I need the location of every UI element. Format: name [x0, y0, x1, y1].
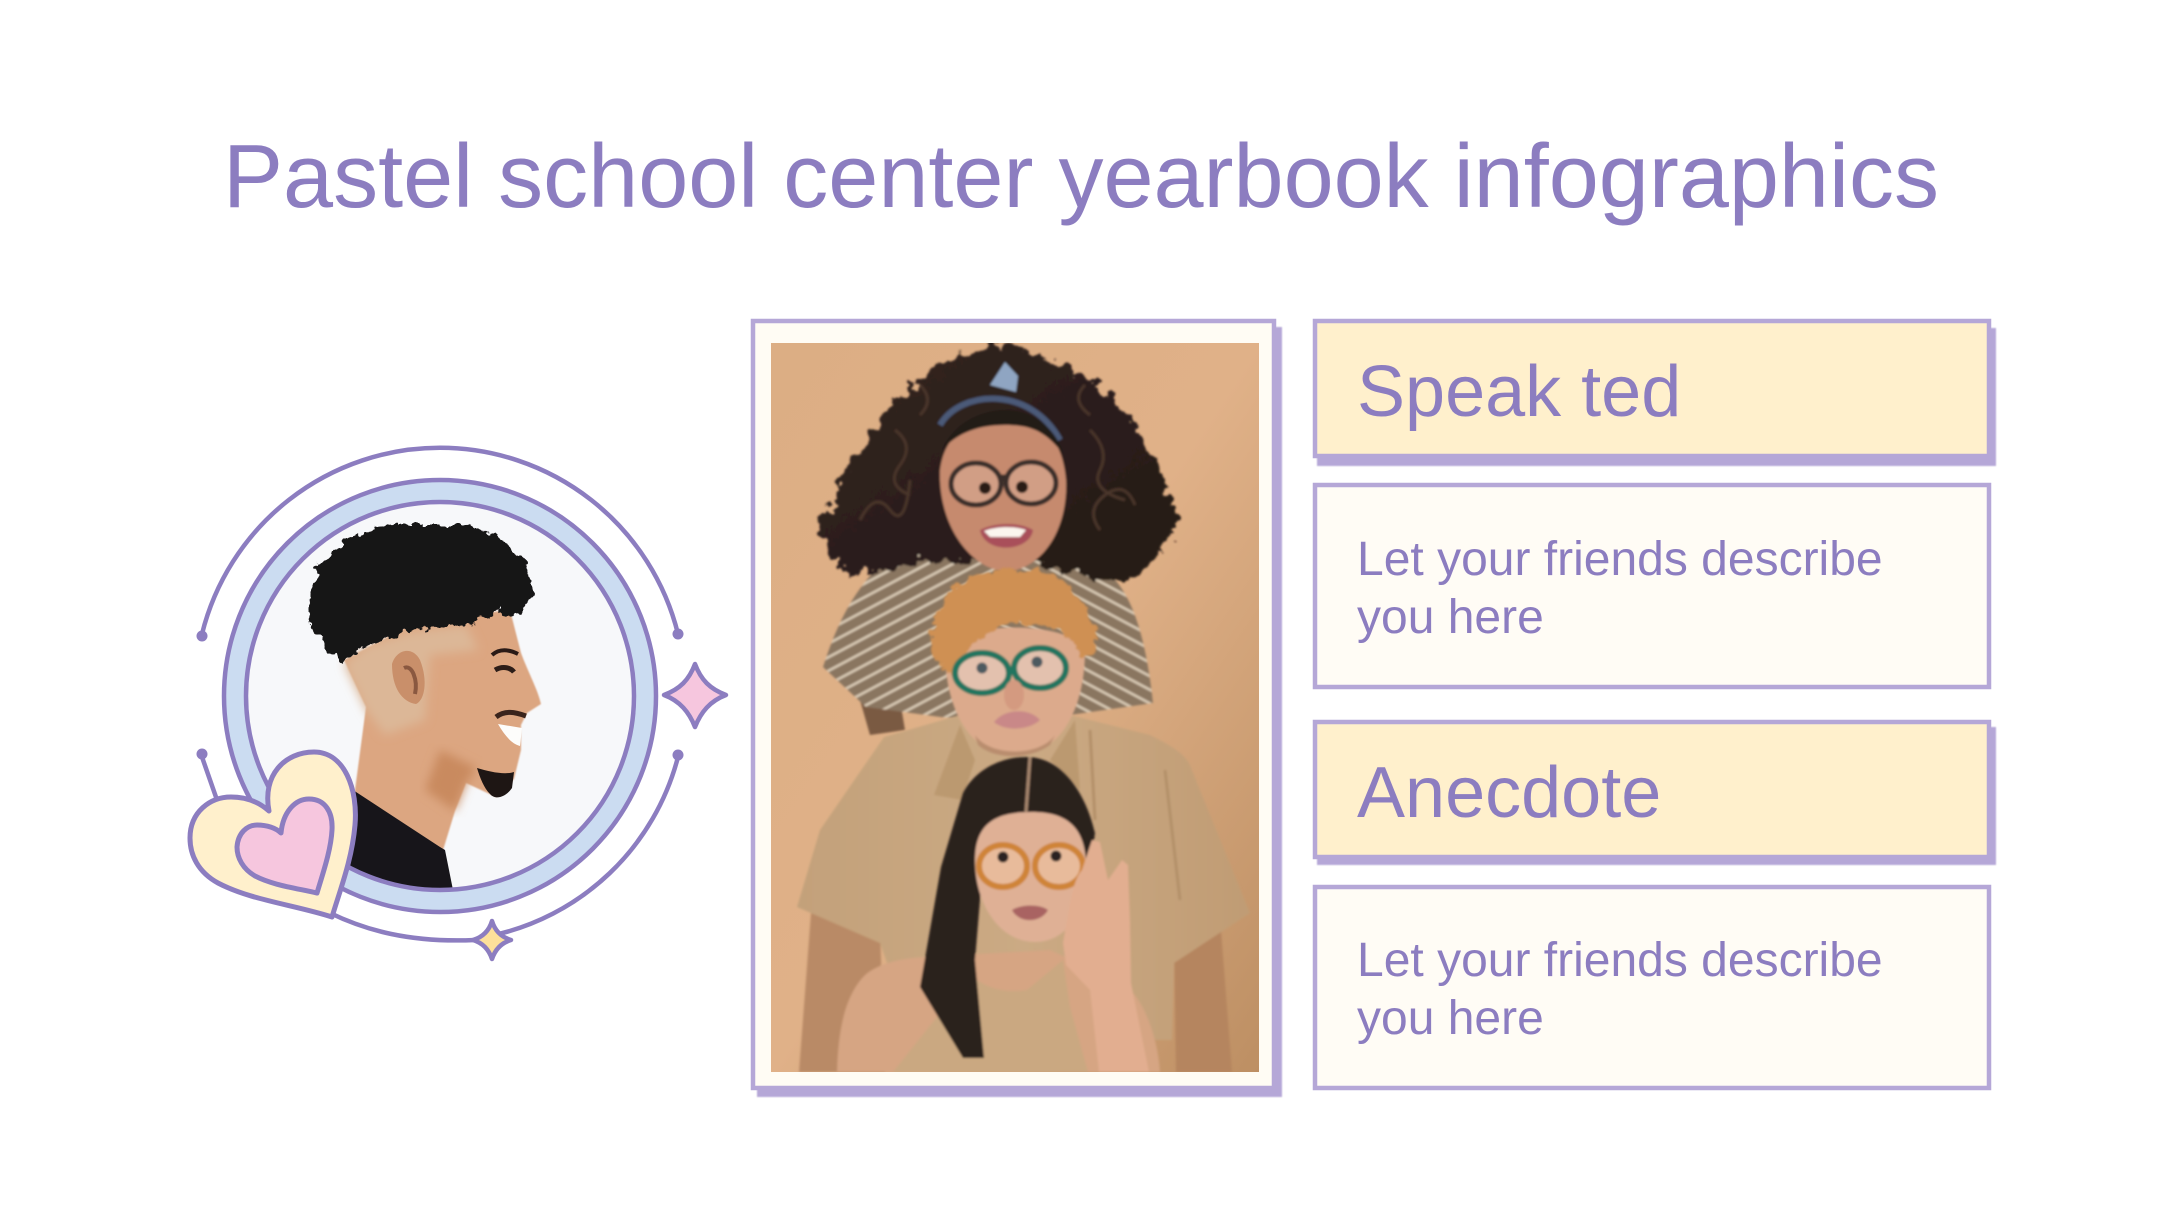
black shirt — [350, 792, 452, 888]
green glasses — [955, 648, 1066, 693]
orange glasses — [979, 845, 1083, 887]
portrait badge — [190, 448, 726, 959]
top person: striped shirt — [823, 343, 1182, 735]
title: Pastel school center yearbook infographics — [223, 127, 1939, 227]
eye and brow — [492, 650, 518, 655]
panel: Anecdote description — [1315, 887, 1989, 1088]
panel: Speak ted description — [1315, 485, 1989, 687]
icon: pink sparkle — [664, 664, 726, 727]
body text: you here — [1357, 591, 1544, 644]
body text: you here — [1357, 992, 1544, 1045]
box — [1315, 887, 1989, 1088]
shirt — [797, 715, 1250, 1040]
mouth — [980, 524, 1033, 548]
icon: pink heart — [237, 799, 332, 893]
box — [1315, 722, 1989, 857]
orbit end dots — [196, 628, 684, 760]
panel: Speak ted heading — [1315, 321, 1996, 466]
heading: Anecdote — [1357, 753, 1661, 833]
body text: Let your friends describe — [1357, 533, 1883, 586]
neck and face — [340, 610, 541, 860]
hair highlights — [860, 385, 1135, 530]
tank top — [893, 960, 1088, 1072]
bottom person — [837, 757, 1160, 1072]
shadow — [1317, 727, 1996, 865]
shadow — [1317, 328, 1996, 466]
hair — [307, 524, 533, 664]
body text: Let your friends describe — [1357, 934, 1883, 987]
face — [945, 628, 1085, 756]
glasses — [951, 462, 1056, 505]
box — [1315, 321, 1989, 456]
beard — [477, 768, 514, 797]
arms — [798, 913, 882, 1072]
icon: yellow sparkle — [473, 921, 511, 959]
outer orbit arcs — [202, 448, 678, 940]
ear — [392, 651, 425, 704]
hand — [1063, 840, 1149, 1072]
blue ring — [235, 491, 645, 901]
inner ring outlines — [246, 502, 634, 890]
man's photo — [308, 522, 542, 888]
headband — [940, 399, 1060, 440]
dark hair — [920, 757, 1095, 1058]
middle person: beige shirt — [797, 569, 1250, 1072]
moustache and mouth — [496, 712, 526, 717]
collar — [934, 725, 975, 800]
frame — [753, 321, 1274, 1088]
heading: Speak ted — [1357, 352, 1681, 432]
curly hair — [823, 343, 1182, 577]
panel: photo frame — [753, 321, 1282, 1097]
face — [940, 418, 1066, 572]
panel: Anecdote heading — [1315, 722, 1996, 865]
icon: yellow heart — [190, 752, 355, 917]
face — [975, 812, 1086, 942]
shoulders and arm — [837, 950, 1160, 1072]
group photo — [771, 343, 1259, 1072]
mouth — [1012, 906, 1048, 920]
frame shadow — [757, 327, 1282, 1097]
hairline — [946, 411, 1060, 448]
box — [1315, 485, 1989, 687]
orange hair — [931, 569, 1097, 675]
nose and lips — [1004, 680, 1024, 710]
